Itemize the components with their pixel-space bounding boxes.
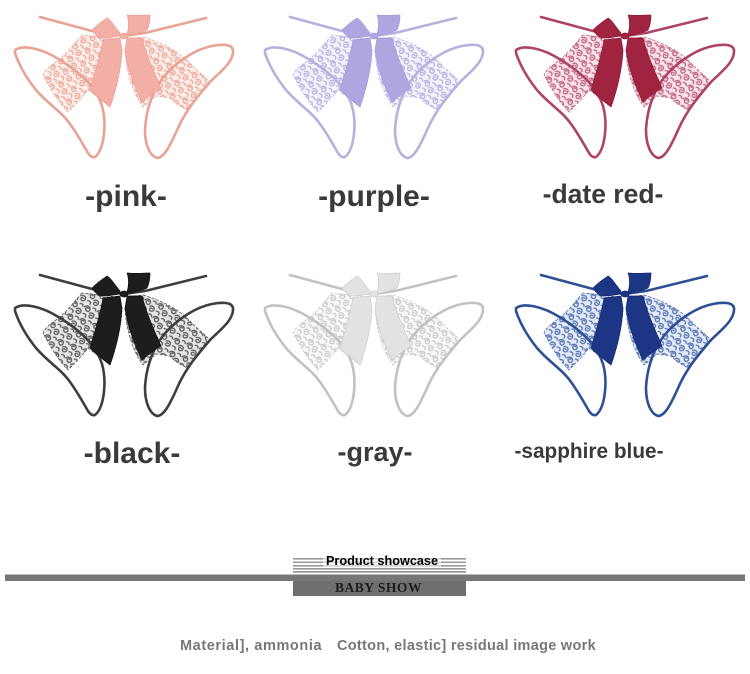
- panel: black colour variant: [15, 273, 233, 470]
- banner heading: Product showcase: [326, 554, 438, 568]
- label: date red: -date red-: [543, 179, 663, 209]
- label: black: -black-: [84, 437, 180, 470]
- section banner: product showcase: [5, 554, 745, 596]
- label: purple: -purple-: [318, 180, 430, 213]
- panel: purple colour variant: [265, 15, 483, 213]
- label: gray: -gray-: [337, 437, 413, 467]
- text block: material note: Material], ammonia: [180, 638, 322, 654]
- product: date red lace briefs: [516, 15, 734, 158]
- product: pink lace briefs: [15, 15, 233, 158]
- label: pink: -pink-: [85, 180, 167, 213]
- product: sapphire blue lace briefs: [516, 273, 734, 416]
- panel: sapphire blue colour variant: [514, 273, 734, 463]
- panel: date red colour variant: [516, 15, 734, 209]
- product: gray lace briefs: [265, 273, 483, 416]
- panel: pink colour variant: [15, 15, 233, 213]
- product: purple lace briefs: [265, 15, 483, 158]
- text block: material note: Cotton, elastic] residual image work: [337, 638, 597, 654]
- panel: gray colour variant: [265, 273, 483, 467]
- product: black lace briefs: [15, 273, 233, 416]
- banner subtitle: BABY SHOW: [335, 580, 422, 595]
- label: sapphire blue: -sapphire blue-: [514, 440, 664, 463]
